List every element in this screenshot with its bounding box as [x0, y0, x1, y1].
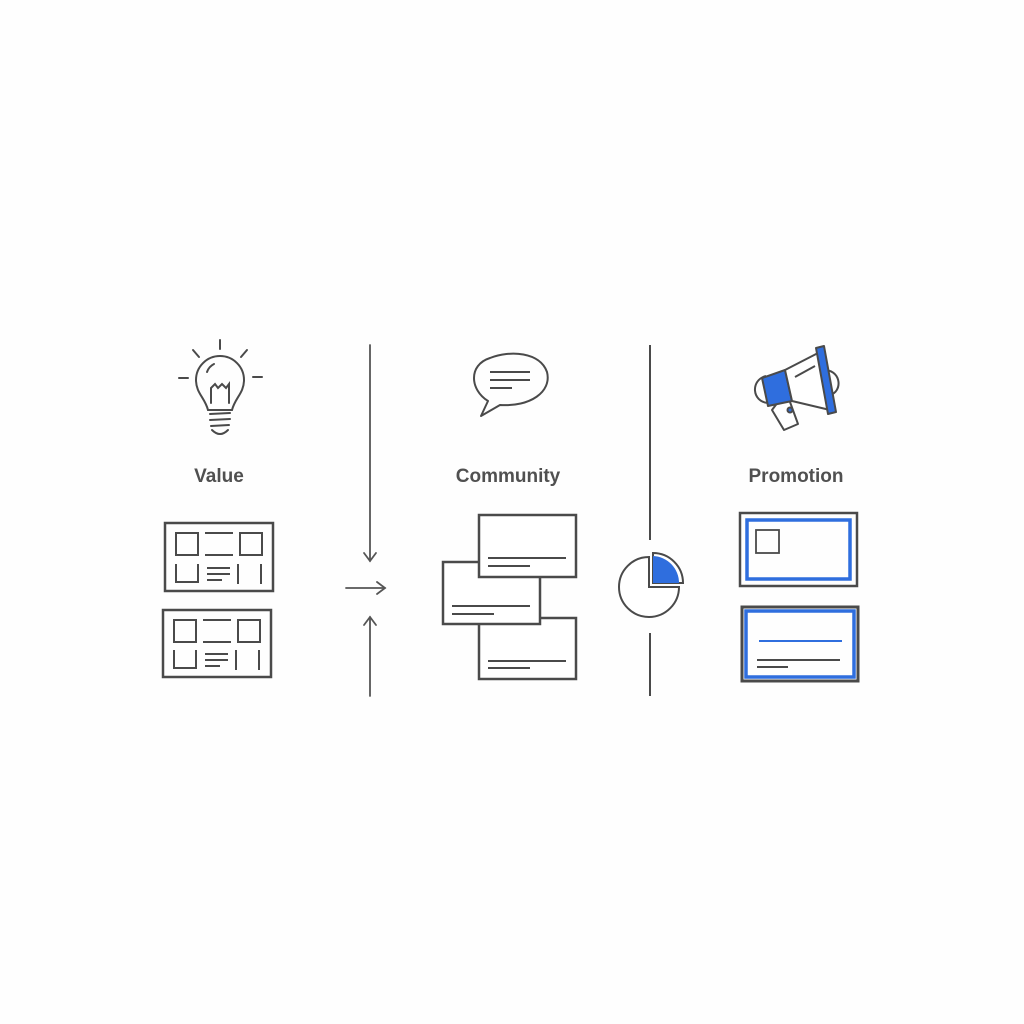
icon: speech bubble	[474, 354, 548, 416]
heading: Value: Value	[194, 466, 244, 487]
heading: Community: Community	[456, 466, 561, 487]
panel: community	[443, 354, 576, 679]
divider with pie chart	[619, 345, 683, 696]
card: promo 1	[740, 513, 857, 586]
card: value layout 1	[165, 523, 273, 591]
card: promo 2	[742, 607, 858, 681]
cards: stacked posts	[443, 515, 576, 679]
chart: pie	[619, 553, 683, 617]
arrows: converging	[346, 345, 385, 696]
icon: light bulb	[179, 340, 262, 434]
panel: value	[163, 340, 273, 677]
heading: Promotion: Promotion	[748, 466, 844, 487]
icon: megaphone	[755, 346, 839, 430]
card: value layout 2	[163, 610, 271, 677]
panel: promotion	[740, 346, 858, 681]
